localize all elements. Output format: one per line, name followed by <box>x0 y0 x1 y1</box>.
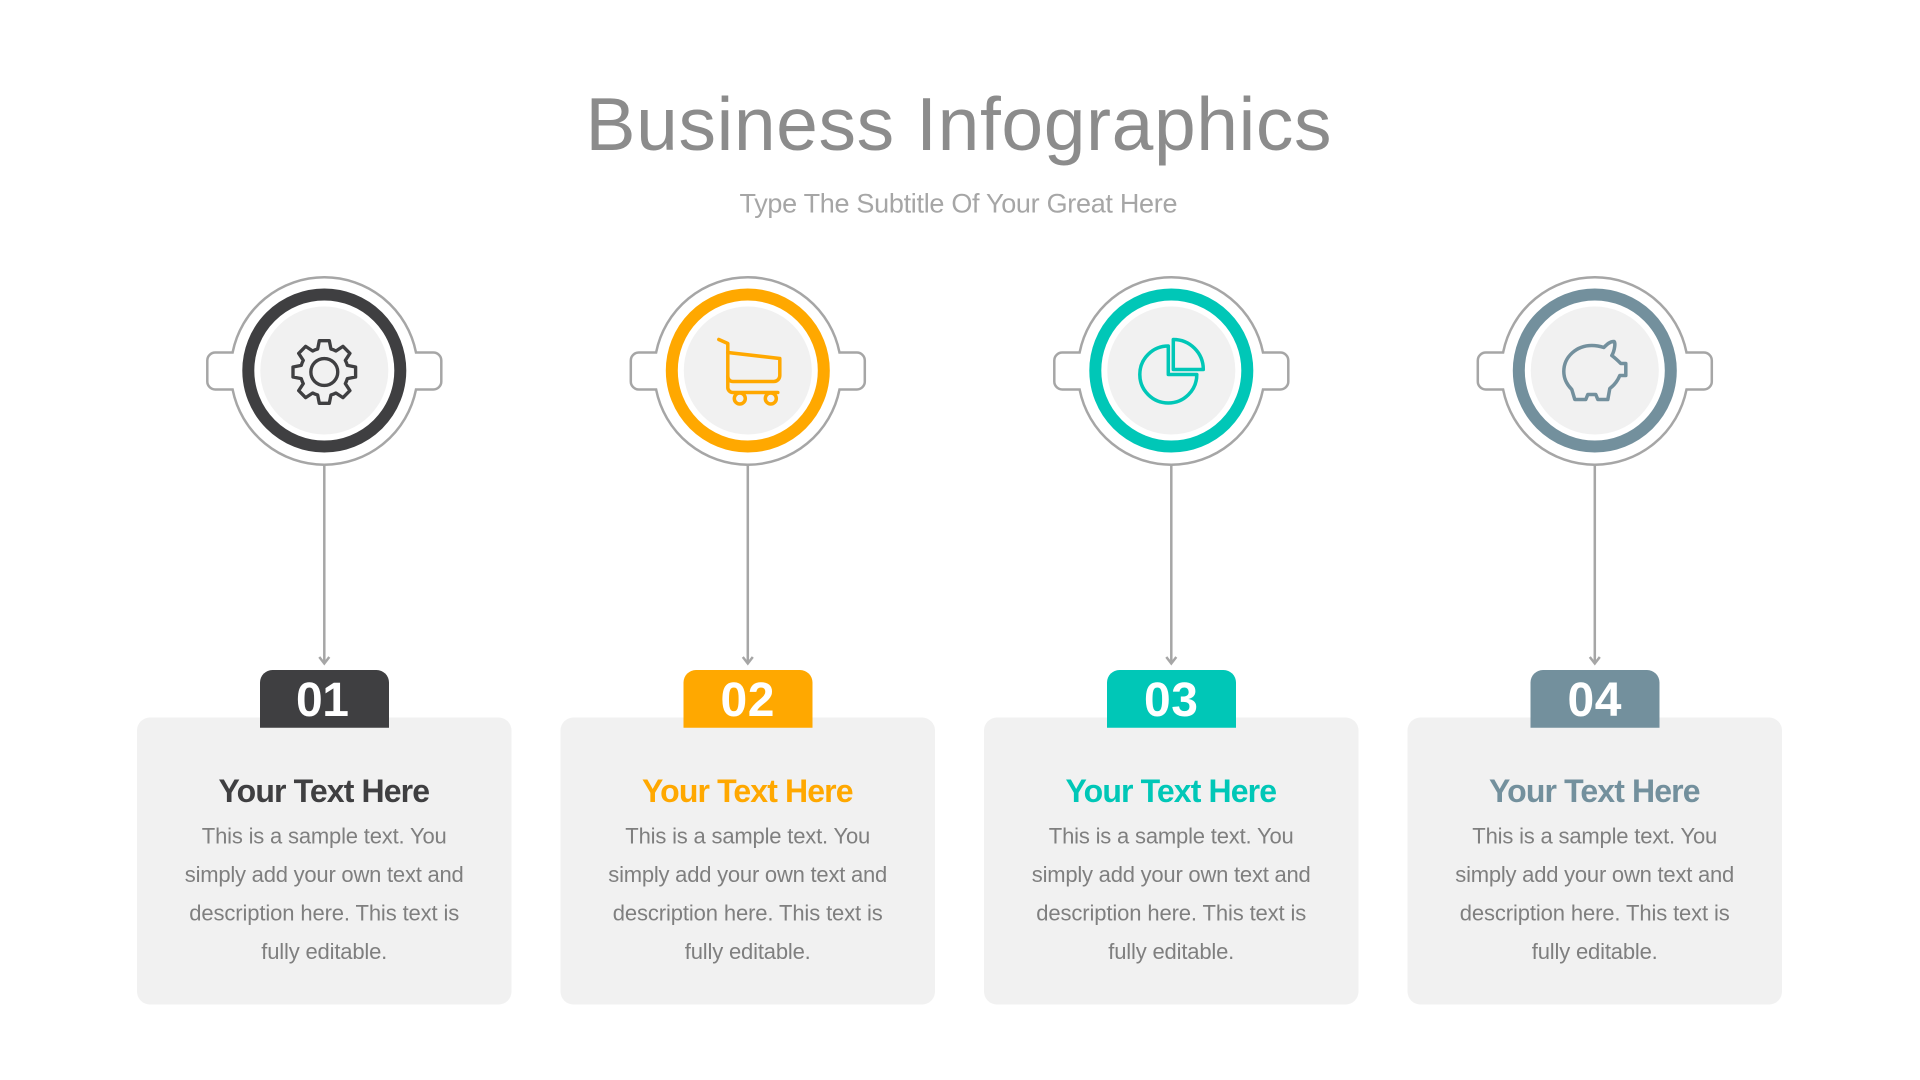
icon badge: pie chart <box>1054 277 1288 465</box>
icon badge: shopping cart <box>631 277 865 465</box>
card body text: fully editable. <box>685 939 811 964</box>
number tab <box>684 670 812 728</box>
card body text <box>608 824 887 964</box>
card heading: Your Text Here <box>642 773 854 809</box>
card body text: description here. This text is <box>1460 900 1730 926</box>
card body text <box>1455 824 1734 964</box>
number tab: 03 <box>1144 674 1198 727</box>
card body text: description here. This text is <box>1036 900 1306 926</box>
panel: step 2 <box>560 277 935 1004</box>
card body text: fully editable. <box>1108 939 1234 964</box>
icon badge: gear <box>207 277 441 465</box>
card body text: simply add your own text and <box>1455 862 1734 887</box>
card body text: description here. This text is <box>613 900 883 926</box>
number tab: 04 <box>1568 674 1622 727</box>
text card <box>137 718 512 1004</box>
panel: step 1 <box>137 277 512 1004</box>
number tab <box>1530 670 1660 728</box>
card body text: simply add your own text and <box>185 862 464 887</box>
card body text: This is a sample text. You <box>202 824 447 848</box>
arrow <box>319 464 329 664</box>
card body text <box>185 824 464 964</box>
number tab: 01 <box>296 674 349 727</box>
panel: step 4 <box>1408 277 1782 1004</box>
card body text: fully editable. <box>261 939 387 964</box>
card body text: fully editable. <box>1532 939 1658 964</box>
number tab: 02 <box>720 674 774 727</box>
card heading: Your Text Here <box>1066 773 1277 809</box>
card body text <box>1032 824 1311 964</box>
number tab <box>1107 670 1236 728</box>
text card <box>1408 718 1782 1004</box>
number tab <box>260 670 389 728</box>
subtitle: Type The Subtitle Of Your Great Here <box>740 188 1178 218</box>
card body text: This is a sample text. You <box>625 824 870 848</box>
icon badge: piggy bank <box>1478 277 1712 465</box>
text card <box>984 718 1358 1004</box>
title: Business Infographics <box>586 82 1332 166</box>
card body text: simply add your own text and <box>608 862 887 887</box>
card heading: Your Text Here <box>219 773 430 809</box>
arrow <box>743 464 753 664</box>
card body text: simply add your own text and <box>1032 862 1311 887</box>
card heading: Your Text Here <box>1489 773 1701 809</box>
arrow <box>1166 464 1176 664</box>
card body text: This is a sample text. You <box>1472 824 1717 848</box>
text card <box>560 718 935 1004</box>
panel: step 3 <box>984 277 1358 1004</box>
card body text: description here. This text is <box>189 900 459 926</box>
arrow <box>1590 464 1600 664</box>
card body text: This is a sample text. You <box>1049 824 1294 848</box>
